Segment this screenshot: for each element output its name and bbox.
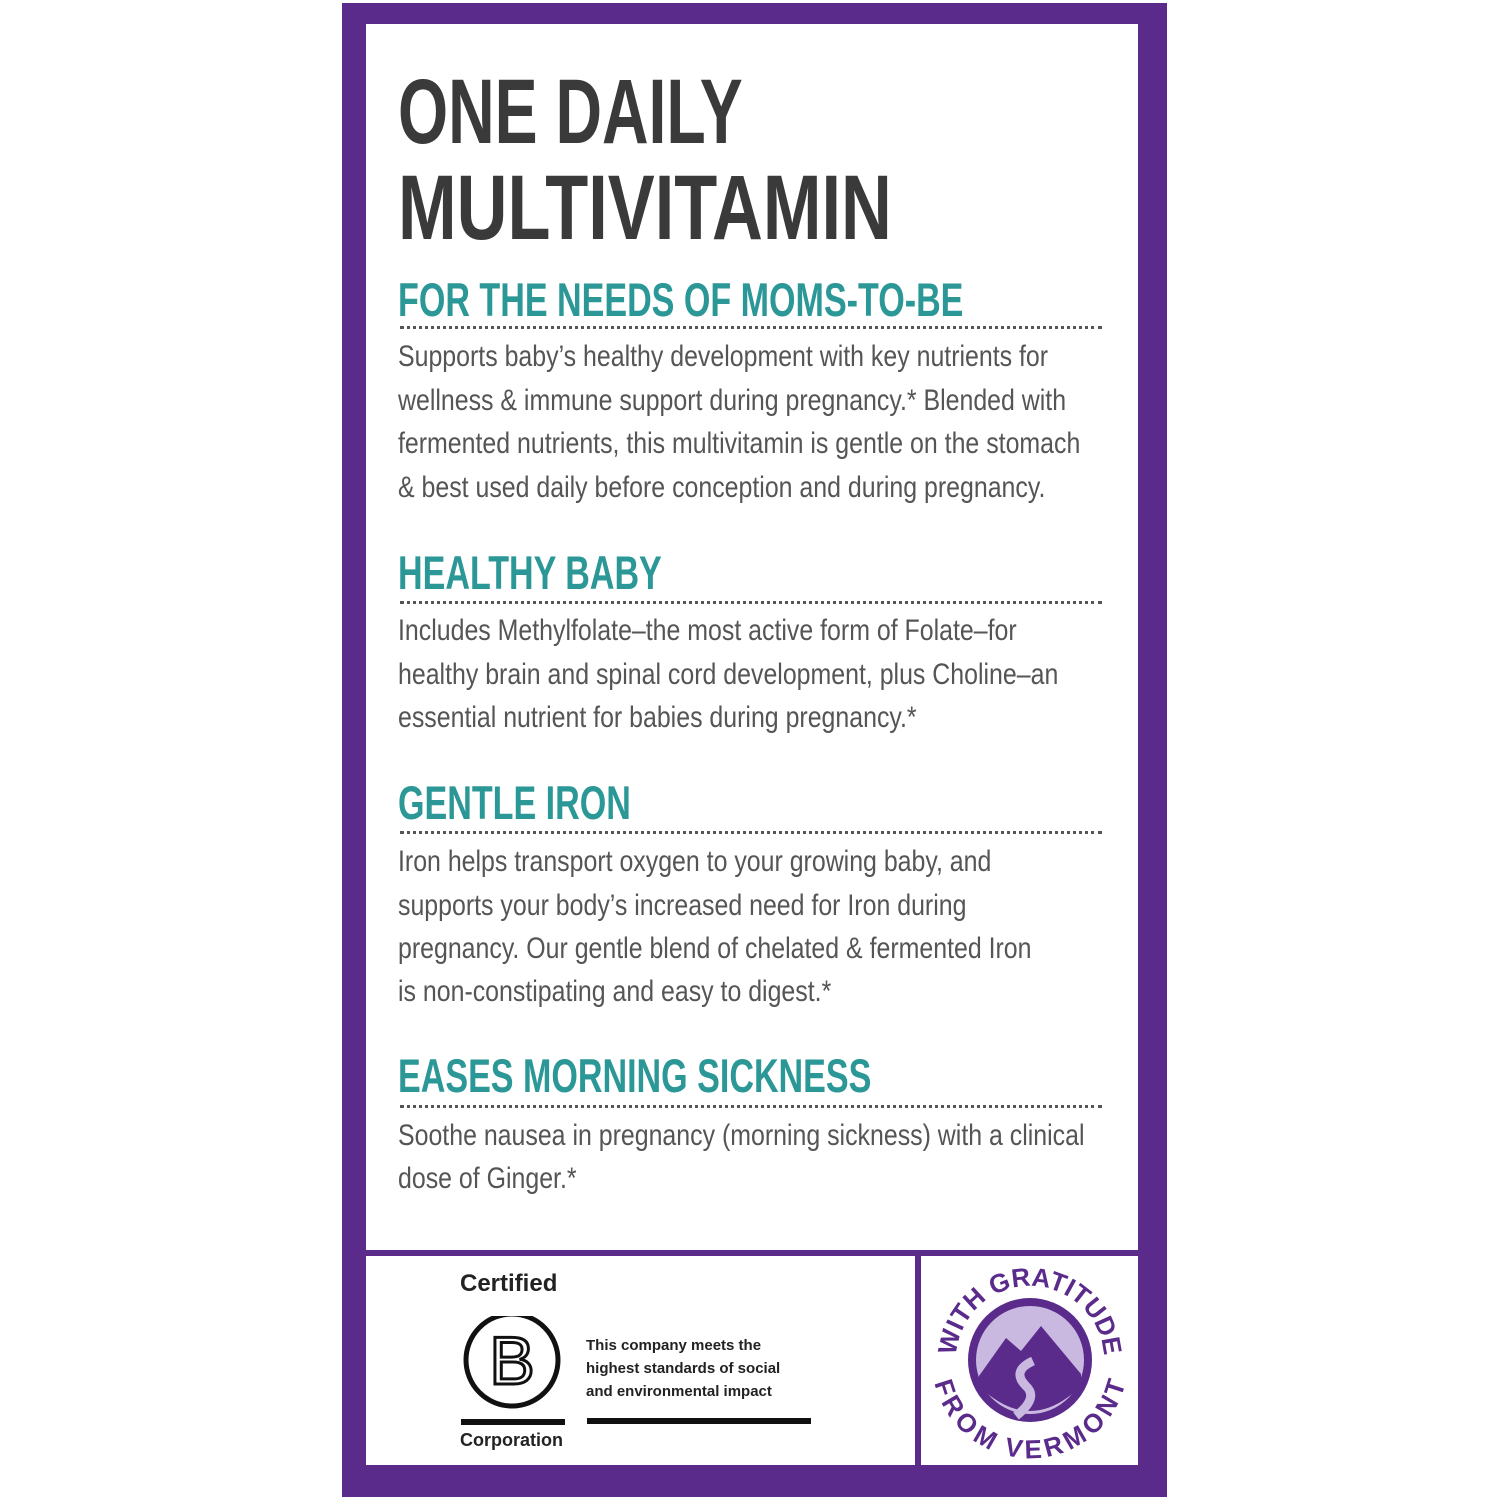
panel: vermont badge: FROM VERMONT — [934, 1378, 1124, 1458]
statement: and environmental impact — [586, 1383, 772, 1400]
title — [398, 61, 892, 259]
body text: healthy brain and spinal cord development, plus Choline–an — [398, 658, 1058, 691]
body text: Soothe nausea in pregnancy (morning sickness) with a clinical — [398, 1119, 1085, 1152]
body text: wellness & immune support during pregnancy.* Blended with — [398, 384, 1066, 417]
panel: B corp — [366, 1256, 915, 1465]
body text: dose of Ginger.* — [398, 1162, 577, 1195]
body text: fermented nutrients, this multivitamin is gentle on the stomach — [398, 427, 1080, 460]
body text: essential nutrient for babies during pregnancy.* — [398, 701, 917, 734]
body text — [398, 614, 1058, 734]
body text — [398, 1119, 1085, 1195]
heading: FOR THE NEEDS OF MOMS-TO-BE — [398, 273, 963, 326]
certified text: Certified — [460, 1270, 557, 1297]
main white panel — [366, 24, 1138, 1250]
section: morning sickness — [398, 1049, 1102, 1195]
body text — [398, 845, 1032, 1008]
text: ONE DAILY — [398, 61, 743, 163]
statement: This company meets the — [586, 1337, 761, 1354]
heading: GENTLE IRON — [398, 776, 631, 829]
body text: pregnancy. Our gentle blend of chelated & fermented Iron — [398, 932, 1032, 965]
body text: supports your body’s increased need for Iron during — [398, 889, 966, 922]
body text: Includes Methylfolate–the most active form of Folate–for — [398, 614, 1017, 647]
body text: Iron helps transport oxygen to your growing baby, and — [398, 845, 991, 878]
purple frame — [342, 3, 1167, 1497]
icon: B logo — [464, 1316, 560, 1408]
section: gentle iron — [398, 776, 1102, 1008]
body text: & best used daily before conception and during pregnancy. — [398, 471, 1045, 504]
icon: B logo: B — [489, 1323, 535, 1399]
heading: EASES MORNING SICKNESS — [398, 1049, 871, 1102]
statement — [586, 1337, 780, 1400]
panel: vermont badge — [921, 1256, 1138, 1465]
heading: HEALTHY BABY — [398, 546, 662, 599]
panel: B corp: Corporation — [460, 1430, 563, 1450]
body text — [398, 340, 1080, 504]
section: moms-to-be — [398, 273, 1102, 504]
panel: vermont badge: WITH GRATITUDE — [938, 1268, 1122, 1355]
body text: is non-constipating and easy to digest.* — [398, 975, 831, 1008]
text: MULTIVITAMIN — [398, 157, 892, 259]
body text: Supports baby’s healthy development with key nutrients for — [398, 340, 1048, 373]
section: healthy baby — [398, 546, 1102, 734]
statement: highest standards of social — [586, 1360, 780, 1377]
